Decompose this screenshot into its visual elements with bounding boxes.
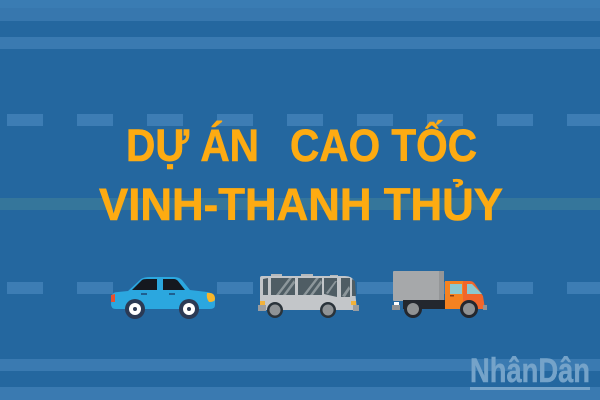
icon: blue car	[111, 277, 215, 319]
title: CAO TỐC	[290, 120, 477, 171]
icon: orange truck	[392, 271, 487, 318]
title	[99, 120, 503, 230]
icon: grey bus	[258, 274, 359, 318]
title: VINH-THANH THỦY	[99, 179, 503, 230]
title: DỰ ÁN	[126, 120, 259, 171]
